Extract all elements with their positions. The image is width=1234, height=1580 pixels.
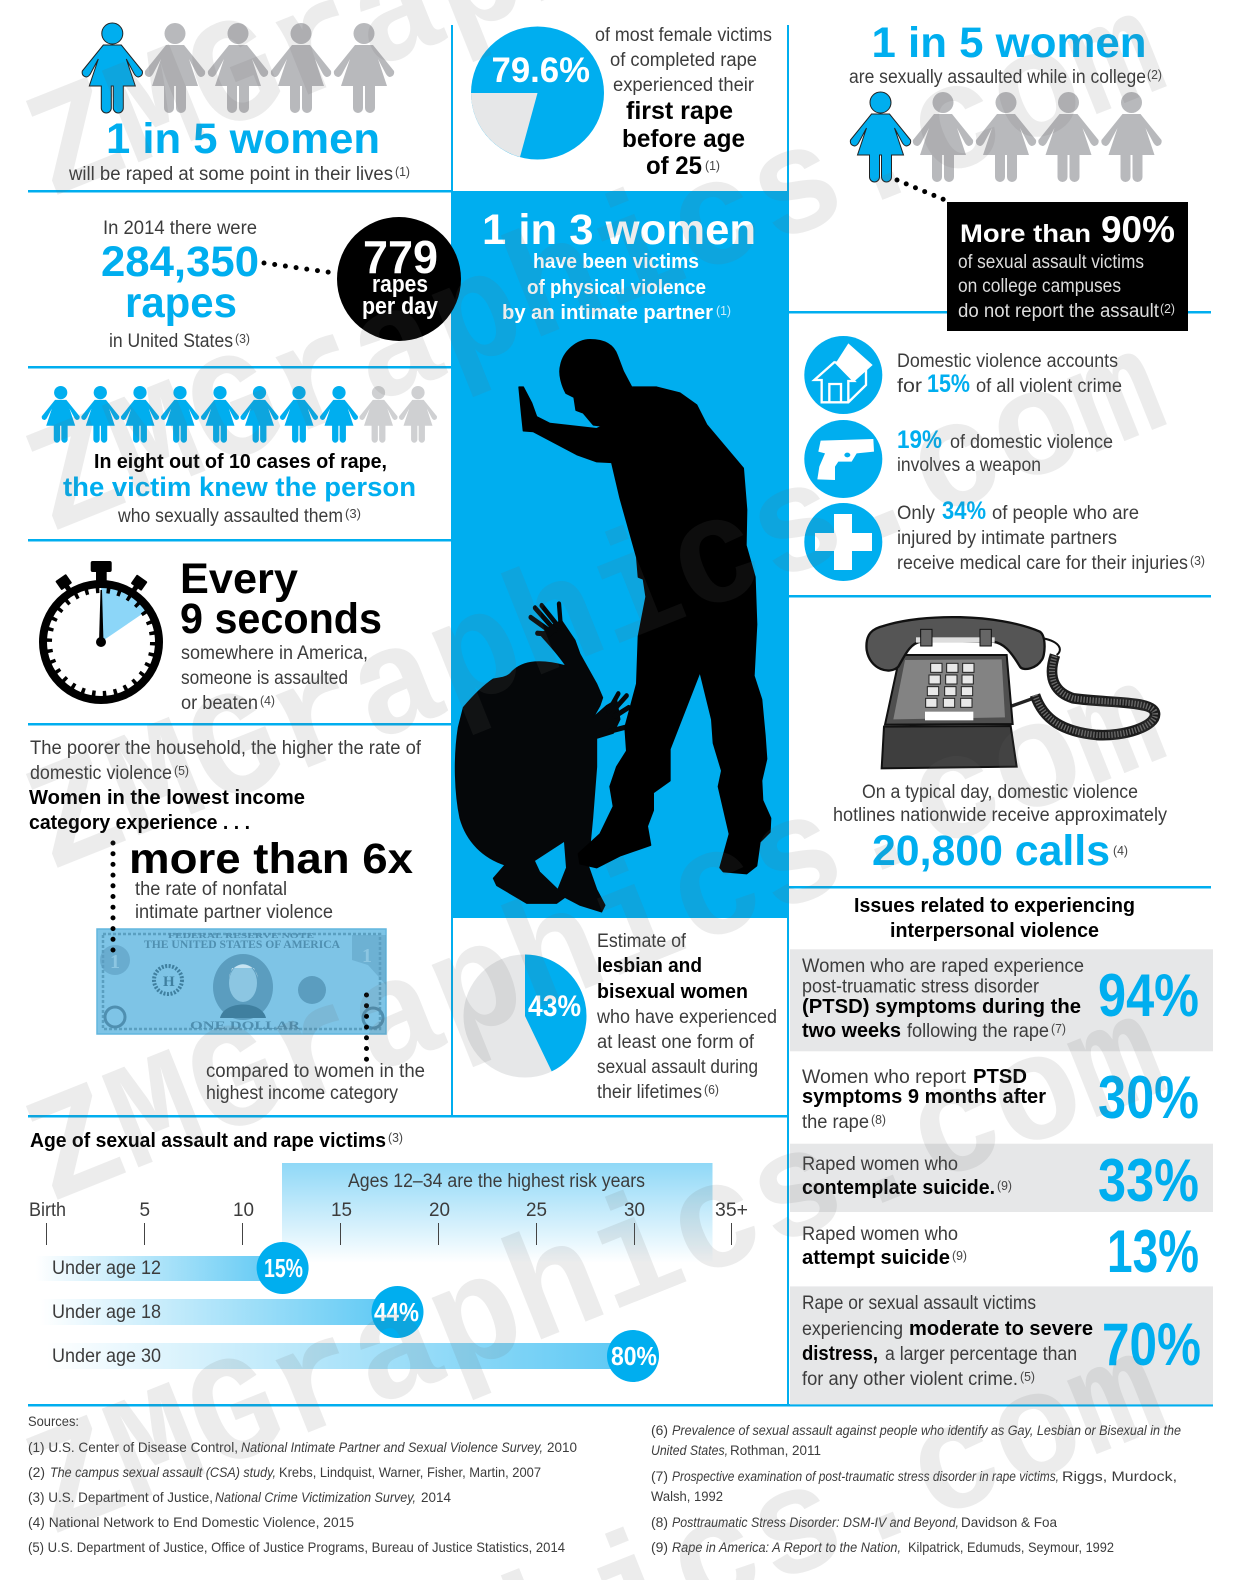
text: their lifetimes: their lifetimes xyxy=(597,1082,702,1103)
text: receive medical care: receive medical care for their injuries xyxy=(897,553,1188,574)
footnote marker: (3) xyxy=(1190,553,1205,568)
panel: 79.6% first rape before 25 xyxy=(471,25,772,180)
icon: five women figures xyxy=(850,92,1162,182)
row: PTSD nine months 30%: Women who report xyxy=(802,1067,967,1088)
source 7: Riggs, Murdock, xyxy=(1062,1468,1177,1484)
source 7: Prospective examination of post-traumatic stress disorder in rape victims, xyxy=(672,1469,1059,1484)
icon: five women figures xyxy=(82,23,394,113)
row: attempt suicide 13%: attempt suicide xyxy=(802,1247,950,1269)
callout: more than 90%: More than xyxy=(960,220,1091,248)
row: PTSD two weeks 94%: 94% xyxy=(1098,962,1199,1029)
source 9: (9) xyxy=(651,1539,668,1555)
panel: 43% lesbian and bisexual women xyxy=(464,931,777,1103)
heading: rapes: rapes xyxy=(125,279,237,327)
silhouette: standing man xyxy=(519,340,771,874)
icon: medical cross xyxy=(804,503,882,581)
source 1 xyxy=(28,1439,577,1455)
source 9: Rape in America: A Report to the Nation, xyxy=(672,1540,901,1555)
source 4: (4) National Network to End Domestic Violence, 2015 xyxy=(28,1514,354,1530)
callout: more than 90%: on college campuses xyxy=(958,276,1121,297)
source 1: (1) U.S. Center of Disease Control, xyxy=(28,1439,238,1455)
text: lesbian and: lesbian and xyxy=(597,955,702,977)
text: highest income category: highest income category xyxy=(206,1083,398,1104)
text: or beaten: or beaten xyxy=(181,693,258,714)
bar: under age 30: Under age 30 xyxy=(52,1346,161,1367)
text: of completed rape: of completed rape xyxy=(610,50,757,71)
row: contemplate suicide 33%: contemplate suicide. xyxy=(802,1177,995,1199)
image: push-button telephone xyxy=(866,617,1155,768)
text: of 25: of 25 xyxy=(646,152,702,180)
row: attempt suicide 13% xyxy=(802,1218,1199,1285)
panel: issues related to interpersonal violence xyxy=(790,895,1213,1404)
icon: stopwatch xyxy=(43,561,159,700)
callout: more than 90%: of sexual assault victims xyxy=(958,252,1144,273)
callout: 779 rapes per day: per day xyxy=(362,293,439,320)
chart: pie 79.6%: 79.6% xyxy=(492,51,590,90)
source 6 xyxy=(651,1422,1181,1458)
source 3: 2014 xyxy=(421,1489,451,1505)
footnote marker: (1) xyxy=(705,158,720,173)
heading: 1 in 5 women: 1 in 5 women xyxy=(872,19,1146,67)
source 7 xyxy=(651,1468,1177,1504)
text: sexual assault during: sexual assault during xyxy=(597,1057,758,1078)
row: PTSD nine months 30%: (8) xyxy=(871,1112,886,1127)
text: intimate partner violence: intimate partner violence xyxy=(135,902,333,923)
text: in United States: in United States xyxy=(109,331,233,352)
icon: ten women figures xyxy=(42,386,437,443)
footnote marker: (1) xyxy=(395,164,410,179)
row: PTSD nine months 30%: PTSD xyxy=(973,1066,1027,1088)
image: silhouette of man and crouching woman xyxy=(455,340,771,912)
callout: 779 rapes per day xyxy=(337,217,461,341)
row: PTSD two weeks 94%: Women who are raped experience xyxy=(802,956,1084,977)
source 8: Posttraumatic Stress Disorder: DSM-IV and Beyond, xyxy=(672,1515,959,1530)
source 9 xyxy=(651,1539,1114,1555)
text: poorer household: The poorer the household, the higher the rate of xyxy=(30,738,422,759)
text: intro: In 2014 there were xyxy=(103,218,257,239)
heading: 20,800 calls: 20,800 calls xyxy=(872,827,1110,875)
dotted connector: lowest income xyxy=(110,843,116,950)
text: somewhere in America: somewhere in America, xyxy=(181,643,368,664)
text: of domestic violence: of domestic violence xyxy=(950,432,1113,453)
panel: household income xyxy=(29,738,425,1104)
bar: under age 18: 44% xyxy=(374,1297,419,1327)
source 2: The campus sexual assault (CSA) study, xyxy=(50,1465,276,1480)
row: attempt suicide 13%: 13% xyxy=(1107,1218,1199,1285)
source 5: (5) U.S. Department of Justice, Office of Justice Programs, Bureau of Justice Statistics, 2014 xyxy=(28,1539,565,1555)
axis: age ticks: Birth xyxy=(29,1200,66,1221)
source 6: (6) xyxy=(651,1422,668,1438)
dotted connector xyxy=(264,263,334,273)
callout: more than 90% xyxy=(947,202,1188,331)
row: contemplate suicide 33% xyxy=(790,1144,1213,1214)
footnote marker: (4) xyxy=(260,693,275,708)
text: compared to women: compared to women in the xyxy=(206,1061,425,1082)
axis: age ticks: 15 xyxy=(331,1200,352,1221)
source 3 xyxy=(28,1489,451,1505)
text: injured by intimate partners: injured by intimate partners xyxy=(897,528,1117,549)
axis: age ticks: 30 xyxy=(624,1200,645,1221)
row: moderate to severe distress 70%: distress, xyxy=(802,1343,878,1365)
text: who sexually assaulted them: who sexually assaulted them xyxy=(117,506,343,527)
gap between the woman's feet xyxy=(535,842,566,889)
image: dollar bill: 1 xyxy=(110,951,120,973)
callout: 779 rapes per day: rapes xyxy=(372,271,428,298)
panel: rapes in 2014 xyxy=(101,217,461,352)
heading: more than 6x: more than 6x xyxy=(129,835,413,883)
stat: 19%: 19% xyxy=(897,426,942,454)
text: women in the lowest income: Women in the lowest income xyxy=(29,787,305,809)
stat: 34%: 34% xyxy=(942,497,986,525)
text: for 15%: for xyxy=(897,376,923,397)
panel: central blue background xyxy=(451,191,789,918)
text: domestic violence: domestic violence xyxy=(30,763,172,784)
source 8: Davidson & Foa xyxy=(961,1514,1057,1530)
text: experienced their: experienced their xyxy=(613,75,755,96)
callout: more than 90%: 90% xyxy=(1101,209,1175,250)
chart: pie 43%: 43% xyxy=(528,990,581,1023)
bar: under age 12: 15% xyxy=(264,1253,303,1283)
footnote marker: (3) xyxy=(235,331,250,346)
image: dollar bill: H xyxy=(163,974,175,990)
chart: pie 43% xyxy=(464,954,586,1078)
watermark: ZMGraphics.com xyxy=(6,307,1189,913)
text: of all violent crime: of all violent crime xyxy=(976,376,1122,397)
source 1: National Intimate Partner and Sexual Violence Survey, xyxy=(241,1440,543,1455)
panel: 1 in 5 women raped xyxy=(68,23,410,185)
callout: more than 90%: do not report the assault xyxy=(958,301,1160,322)
stat: 15%: 15% xyxy=(927,370,970,398)
highlight: ages 12 to 34 xyxy=(282,1163,712,1263)
footnote marker: (4) xyxy=(1113,843,1128,858)
footnote marker: (3) xyxy=(388,1130,403,1145)
callout: 779 rapes per day: 779 xyxy=(363,231,438,283)
row: PTSD two weeks 94%: two weeks xyxy=(802,1020,901,1042)
text: eight out of 10: In eight out of 10 cases of rape, xyxy=(94,451,387,473)
source 6: Rothman, 2011 xyxy=(730,1442,821,1458)
heading: 9 seconds: 9 seconds xyxy=(180,595,382,643)
source 6: United States, xyxy=(651,1443,728,1458)
row: PTSD two weeks 94%: following the rape xyxy=(907,1021,1049,1042)
source 6: Prevalence of sexual assault against people who identify as Gay, Lesbian or Bisexual in the xyxy=(672,1423,1181,1438)
row: contemplate suicide 33%: (9) xyxy=(997,1178,1012,1193)
footnote marker: (1) xyxy=(716,303,731,318)
panel: hotline calls xyxy=(833,617,1167,875)
watermark: ZMGraphics.com xyxy=(6,639,1189,1245)
image: dollar bill: ONE DOLLAR xyxy=(190,1018,300,1032)
row: moderate to severe distress 70%: experiencing xyxy=(802,1319,903,1340)
row: moderate to severe distress 70%: 70% xyxy=(1102,1311,1201,1378)
row: PTSD two weeks 94%: post-truamatic stress disorder xyxy=(802,977,1040,998)
row: contemplate suicide 33%: 33% xyxy=(1098,1147,1199,1214)
text: of most female victims: of most female victims xyxy=(595,25,772,46)
text: have been victims: have been victims xyxy=(533,251,699,273)
source 3: National Crime Victimization Survey, xyxy=(215,1490,416,1505)
text: sexually assaulted in college: are sexually assaulted while in college xyxy=(849,67,1146,88)
text: involves a weapon: involves a weapon xyxy=(897,455,1041,476)
heading: every: Every xyxy=(180,555,298,603)
chart: pie 79.6% xyxy=(471,26,604,160)
heading: issues related: Issues related to experiencing xyxy=(854,895,1135,917)
row: moderate to severe distress 70%: Rape or sexual assault victims xyxy=(802,1293,1036,1314)
axis: age ticks: 5 xyxy=(140,1200,150,1221)
text: bisexual women: bisexual women xyxy=(597,981,748,1003)
callout: more than 90%: (2) xyxy=(1160,301,1175,316)
icon: house xyxy=(804,336,882,414)
row: moderate to severe distress 70%: a larger percentage than xyxy=(885,1344,1077,1365)
source 2: Krebs, Lindquist, Warner, Fisher, Martin, 2007 xyxy=(279,1464,541,1480)
row: moderate to severe distress 70%: moderate to severe xyxy=(909,1318,1093,1340)
text: first rape: first rape xyxy=(626,97,733,125)
panel: 1 in 5 women in college xyxy=(849,19,1188,331)
text: category experience: category experience . . . xyxy=(29,812,250,834)
footnote marker: (3) xyxy=(345,506,361,521)
row: attempt suicide 13%: (9) xyxy=(952,1248,967,1263)
row: PTSD nine months 30%: 30% xyxy=(1098,1064,1199,1131)
axis: age ticks: 10 xyxy=(233,1200,254,1221)
panel: every 9 seconds xyxy=(43,555,382,714)
panel: victim knew the person xyxy=(42,386,437,527)
axis: age ticks: 20 xyxy=(429,1200,450,1221)
text: will be raped: will be raped at some point in their lives xyxy=(68,164,393,185)
bar: under age 18 xyxy=(40,1286,424,1338)
text: someone is assaulted: someone is assaulted xyxy=(181,668,348,689)
text: estimate of: Estimate of xyxy=(597,931,687,952)
text: before age: before age xyxy=(622,125,745,153)
text: by an intimate partner: by an intimate partner xyxy=(502,302,713,324)
panel: sources xyxy=(28,1413,1181,1555)
panel: domestic violence stats xyxy=(804,336,1205,581)
heading: age of sexual assault and rape victims: Age of sexual assault and rape victims xyxy=(30,1130,386,1152)
text: at least one form of: at least one form of xyxy=(597,1032,755,1053)
bar: under age 30 xyxy=(47,1330,659,1382)
bar: under age 12: Under age 12 xyxy=(52,1258,161,1279)
row: moderate to severe distress 70% xyxy=(790,1286,1213,1404)
axis: age ticks xyxy=(29,1200,748,1245)
text: hotlines nationwide: hotlines nationwide receive approximately xyxy=(833,805,1167,826)
row: moderate to severe distress 70%: (5) xyxy=(1020,1369,1035,1384)
text: domestic violence accounts: Domestic violence accounts xyxy=(897,351,1118,372)
bar: under age 18: Under age 18 xyxy=(52,1302,161,1323)
text: who have experienced: who have experienced xyxy=(596,1007,777,1028)
footnote marker: (5) xyxy=(174,763,189,778)
heading: 1 in 5 women: 1 in 5 women xyxy=(106,115,380,163)
source 8: (8) xyxy=(651,1514,668,1530)
text: rate of nonfatal: the rate of nonfatal xyxy=(135,879,287,900)
panel: age of victims chart xyxy=(29,1130,748,1382)
image: dollar bill xyxy=(97,929,386,1034)
image: dollar bill: 1 xyxy=(362,945,372,967)
row: PTSD two weeks 94% xyxy=(790,949,1213,1051)
source 2 xyxy=(28,1464,541,1480)
source 2: (2) xyxy=(28,1464,45,1480)
source 7: (7) xyxy=(651,1468,668,1484)
row: moderate to severe distress 70%: for any other violent crime. xyxy=(802,1369,1018,1390)
source 1: 2010 xyxy=(547,1439,577,1455)
source 7: Walsh, 1992 xyxy=(651,1488,723,1504)
axis: age ticks: 35+ xyxy=(715,1200,748,1221)
heading: interpersonal violence: interpersonal violence xyxy=(890,920,1099,942)
heading: 1 in 3 women: 1 in 3 women xyxy=(482,206,756,254)
text: only: Only xyxy=(897,503,935,524)
source 3: (3) U.S. Department of Justice, xyxy=(28,1489,213,1505)
text: on a typical day: On a typical day, domestic violence xyxy=(862,782,1138,803)
watermark: ZMGraphics.com xyxy=(6,972,1189,1578)
row: PTSD nine months 30% xyxy=(802,1064,1199,1133)
row: PTSD two weeks 94%: (PTSD) symptoms during the xyxy=(802,996,1081,1018)
row: PTSD nine months 30%: the rape xyxy=(802,1112,869,1133)
panel: 1 in 3 women xyxy=(455,206,771,912)
dotted connector: highest income xyxy=(364,995,369,1060)
footnote marker: (6) xyxy=(704,1082,719,1097)
heading: the victim knew the person: the victim knew the person xyxy=(63,472,416,502)
heading: sources: Sources: xyxy=(28,1413,79,1429)
row: PTSD two weeks 94%: (7) xyxy=(1051,1021,1066,1036)
number: 284,350: 284,350 xyxy=(101,238,259,286)
footnote marker: (2) xyxy=(1147,67,1162,82)
image: dollar bill: THE UNITED STATES OF AMERICA xyxy=(144,937,340,951)
row: PTSD nine months 30%: symptoms 9 months after xyxy=(802,1086,1046,1108)
row: contemplate suicide 33%: Raped women who xyxy=(802,1154,958,1175)
row: attempt suicide 13%: Raped women who xyxy=(802,1224,958,1245)
axis: age ticks: 25 xyxy=(526,1200,547,1221)
text: of people who are: of people who are xyxy=(992,503,1139,524)
text: of physical violence: of physical violence xyxy=(527,277,706,299)
source 9: Kilpatrick, Edumuds, Seymour, 1992 xyxy=(908,1539,1114,1555)
silhouette: crouching woman xyxy=(455,604,629,912)
dotted connector xyxy=(897,180,952,203)
bar: under age 12 xyxy=(36,1242,309,1294)
image: dollar bill: FEDERAL RESERVE NOTE xyxy=(168,932,315,940)
bar: under age 30: 80% xyxy=(611,1341,657,1371)
icon: handgun xyxy=(804,420,882,498)
highlight: ages 12 to 34: Ages 12–34 are the highest risk years xyxy=(348,1171,645,1192)
